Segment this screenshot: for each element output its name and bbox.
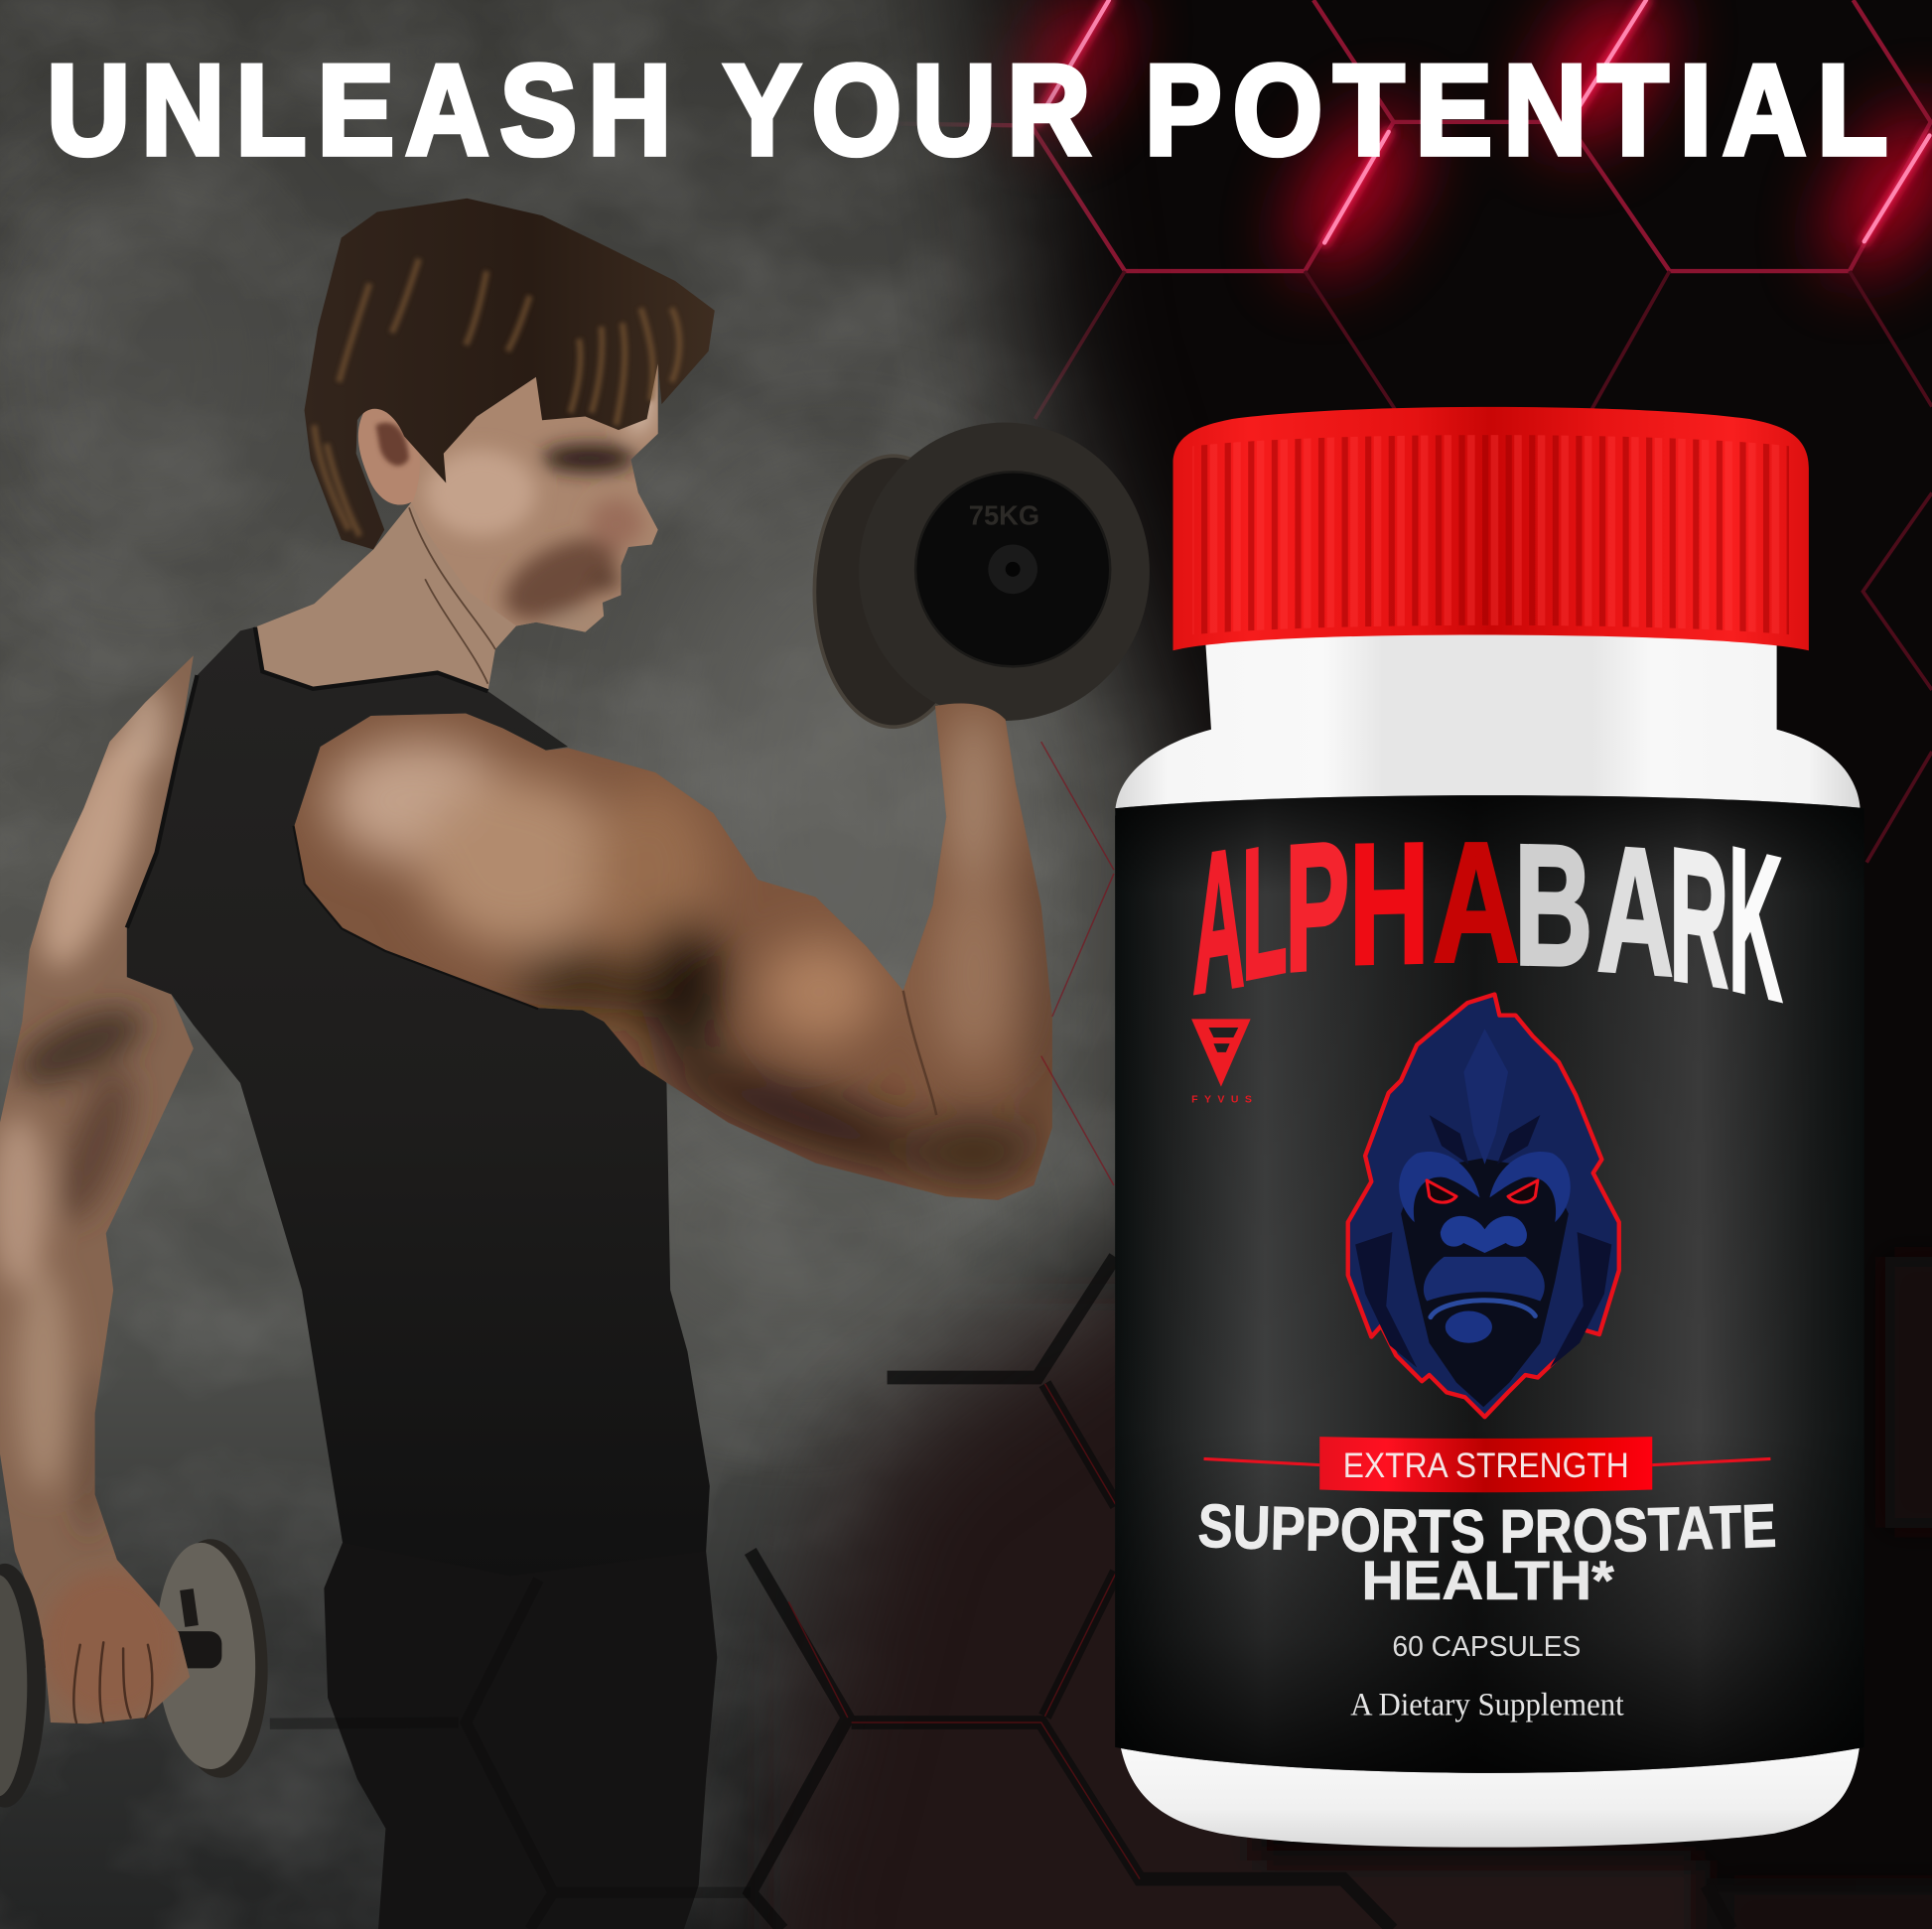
- hair: [305, 199, 715, 550]
- mouth: [1431, 1301, 1535, 1317]
- title: UNLEASH YOUR POTENTIAL: [47, 40, 1887, 183]
- muzzle: [1424, 1257, 1545, 1302]
- supplement note: A Dietary Supplement: [1350, 1687, 1624, 1722]
- dark hexagon frame lines: [751, 1257, 1932, 1929]
- brand name: ALPHABARK: K: [1728, 802, 1782, 1044]
- brand logo: FYVUS: [1191, 1019, 1252, 1106]
- brows: [1399, 1152, 1480, 1222]
- fingers: [73, 1642, 152, 1722]
- brand name: ALPHABARK: P: [1285, 802, 1349, 1010]
- capsule count: 60 CAPSULES: [1392, 1631, 1581, 1663]
- plate weight mark: 75KG: [969, 500, 1039, 531]
- product claim: SUPPORTS PROSTATE: [1199, 1503, 1775, 1554]
- strength banner: EXTRA STRENGTH: [1343, 1447, 1629, 1485]
- neck crease: [409, 507, 495, 684]
- bright neon tubes: [1035, 0, 1930, 242]
- tank seam: [127, 627, 538, 1008]
- dim hexagon lines: [773, 0, 1931, 271]
- product bottle: [1075, 407, 1863, 1848]
- lower dumbbell: [37, 1537, 274, 1780]
- background: grey smoke: [0, 0, 1211, 1929]
- brand name: ALPHABARK: R: [1670, 808, 1728, 1029]
- left plate: [0, 1564, 46, 1808]
- red ribbed cap: [1173, 407, 1809, 650]
- brand name: ALPHABARK: A: [1596, 809, 1673, 1014]
- bottle base: [1119, 1737, 1861, 1848]
- ear: [358, 401, 420, 505]
- nose: [1440, 1215, 1528, 1254]
- lower reddish hexagon cells: [763, 1257, 1932, 1929]
- product claim: HEALTH*: [1361, 1549, 1614, 1611]
- brand name: ALPHABARK: [1192, 802, 1782, 1044]
- product claim: [1199, 1503, 1775, 1611]
- gorilla mascot: [1348, 995, 1619, 1417]
- brand name: ALPHABARK: A: [1433, 808, 1519, 998]
- hair highlights: [314, 259, 679, 536]
- brand name: ALPHABARK: A: [1192, 805, 1245, 1035]
- black label: [1115, 795, 1864, 1773]
- brand name: ALPHABARK: B: [1514, 808, 1592, 1002]
- thin red hexagon lines over smoke: [1041, 742, 1114, 1185]
- left arm and hand: [0, 655, 194, 1723]
- fur and face shadow: [1401, 1159, 1569, 1407]
- brand name: ALPHABARK: H: [1349, 806, 1430, 1000]
- neon glow: [1001, 0, 1932, 292]
- face: [407, 363, 658, 636]
- chin: [1446, 1310, 1492, 1343]
- hexagon lines over shorts: [270, 1580, 751, 1929]
- bottle neck and shoulder: [1115, 634, 1861, 816]
- flexed arm and back: [295, 702, 1057, 1200]
- upper dumbbell: [814, 423, 1150, 727]
- tank top: [127, 627, 710, 1576]
- neck and upper back: [255, 492, 536, 691]
- shorts: [324, 1543, 717, 1929]
- strength banner: [1204, 1437, 1770, 1492]
- man lifting dumbbells: [0, 199, 1150, 1929]
- arm muscle shading: [327, 702, 1057, 1193]
- brand name: ALPHABARK: L: [1242, 804, 1287, 1020]
- eyes: [1427, 1180, 1538, 1202]
- brand logo: FYVUS: FYVUS: [1191, 1094, 1252, 1106]
